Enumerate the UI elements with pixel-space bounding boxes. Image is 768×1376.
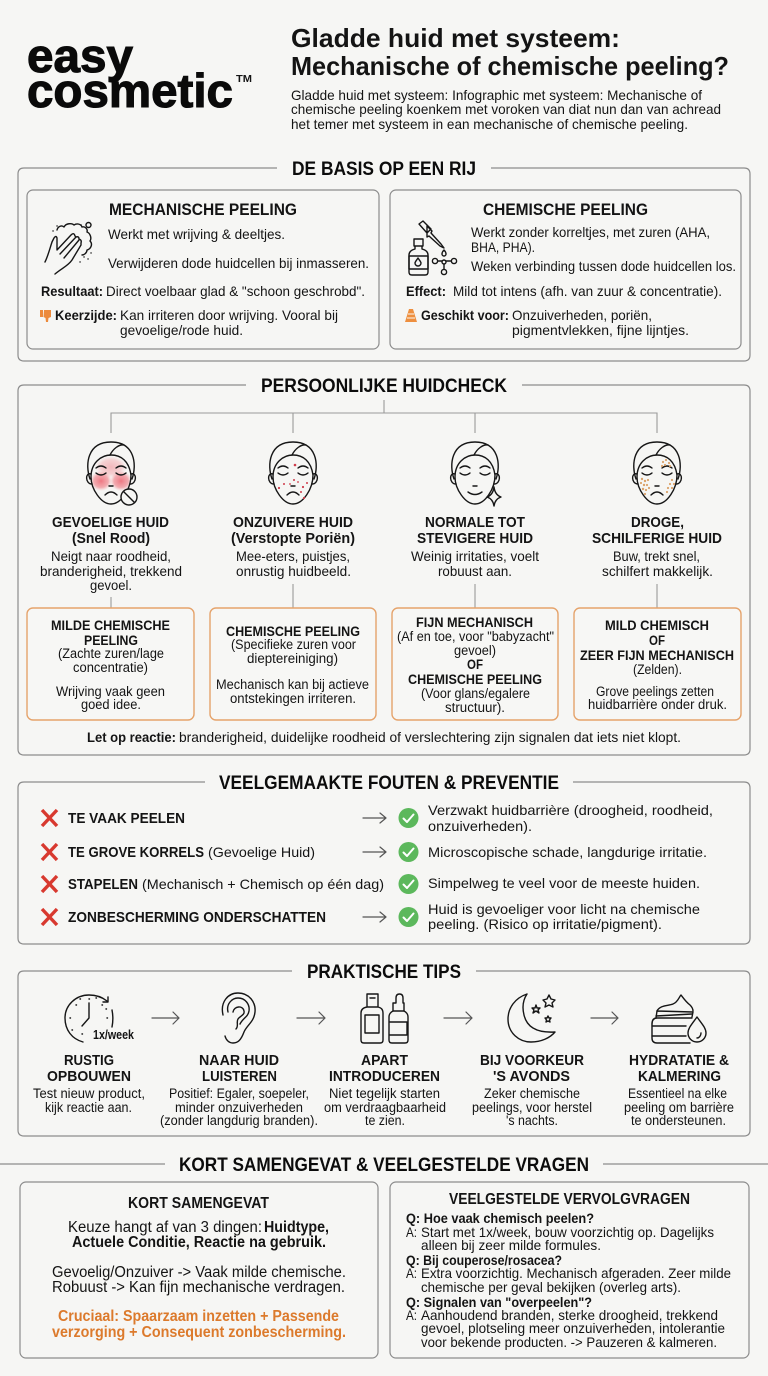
callout: cruciaal xyxy=(52,1308,346,1341)
tip: rustig opbouwen: Test nieuw product, xyxy=(33,1086,145,1101)
column: gevoelige huid: gevoel. xyxy=(90,577,132,593)
panel: kort samengevat: Actuele Conditie, Reactie na gebruik. xyxy=(72,1234,326,1251)
advice box: mild chemisch of zeer fijn mechanisch: Grove peelings zetten xyxy=(596,684,714,699)
panel: veelgestelde vervolgvragen xyxy=(390,1182,749,1358)
tip: hydratatie en kalmering: KALMERING xyxy=(638,1068,721,1085)
note: let op reactie: Let op reactie: xyxy=(87,729,176,745)
column: onzuivere huid xyxy=(210,442,376,720)
faq 3: A: xyxy=(406,1307,417,1323)
tip: naar huid luisteren: minder onzuiverheden xyxy=(175,1100,303,1115)
panel: chemische peeling: Geschikt voor: xyxy=(421,307,509,323)
icon: two bottles xyxy=(361,994,408,1043)
advice box: fijn mechanisch of chemische peeling: OF xyxy=(467,656,483,672)
faq 1: alleen bij zeer milde formules. xyxy=(421,1237,601,1253)
column: normale huid: Weinig irritaties, voelt xyxy=(411,548,539,564)
column: normale huid xyxy=(392,442,558,720)
faq 3 xyxy=(406,1294,725,1350)
advice box: mild chemisch of zeer fijn mechanisch: (Zelden). xyxy=(633,662,682,677)
panel: mechanische peeling: Kan irriteren door wrijving. Vooral bij xyxy=(120,307,338,323)
icon: red sensitive face xyxy=(87,442,137,505)
faq 2 xyxy=(406,1252,731,1295)
row: te vaak peelen: TE VAAK PEELEN xyxy=(68,810,185,827)
panel: mechanische peeling: Direct voelbaar glad & "schoon geschrobd". xyxy=(106,283,365,299)
panel: chemische peeling xyxy=(390,190,741,349)
column: gevoelige huid: Neigt naar roodheid, xyxy=(51,548,171,564)
tip: rustig opbouwen: kijk reactie aan. xyxy=(45,1100,132,1115)
logo: easy cosmetic: cosmetic xyxy=(27,64,233,117)
panel: veelgestelde vervolgvragen: VEELGESTELDE VERVOLGVRAGEN xyxy=(449,1191,690,1208)
panel: de basis op een rij xyxy=(18,158,750,361)
column: normale huid: robuust aan. xyxy=(438,563,512,579)
tip: apart introduceren xyxy=(324,994,446,1128)
icon: smiling face with sparkle xyxy=(451,442,501,506)
tip: 's avonds: BIJ VOORKEUR xyxy=(480,1052,584,1069)
panel: kort samengevat: KORT SAMENGEVAT xyxy=(128,1195,269,1212)
intro paragraph: chemische peeling koenkem met voroken van diat nun dan van achread xyxy=(291,101,721,117)
advice box: fijn mechanisch of chemische peeling: gevoel) xyxy=(454,643,496,658)
panel: mechanische peeling: MECHANISCHE PEELING xyxy=(109,200,297,219)
row: stapelen: STAPELEN xyxy=(68,876,138,893)
advice box: chemische peeling: (Specifieke zuren voor xyxy=(231,637,356,652)
tip: naar huid luisteren xyxy=(160,993,318,1128)
row: te grove korrels: TE GROVE KORRELS xyxy=(68,844,204,861)
tip: hydratatie en kalmering: te ondersteunen. xyxy=(631,1113,726,1128)
advice box: chemische peeling: ontstekingen irriteren. xyxy=(230,691,356,706)
advice box: milde chemische peeling: concentratie) xyxy=(73,660,148,675)
row: te vaak peelen: Verzwakt huidbarrière (droogheid, roodheid, xyxy=(428,802,713,818)
tip: rustig opbouwen xyxy=(33,995,145,1115)
panel: mechanische peeling: Werkt met wrijving & deeltjes. xyxy=(108,226,285,242)
advice box: fijn mechanisch of chemische peeling xyxy=(392,608,558,720)
panel: chemische peeling: Effect: xyxy=(406,283,446,299)
icon: cream jar with drop xyxy=(652,995,706,1043)
icon: face with blemishes xyxy=(269,442,317,504)
logo: easy cosmetic xyxy=(27,29,252,117)
logo: easy cosmetic: easy xyxy=(27,29,133,82)
tip: apart introduceren: om verdraagbaarheid xyxy=(324,1100,446,1115)
panel: kort samengevat: Gevoelig/Onzuiver -> Vaak milde chemische. xyxy=(52,1264,346,1281)
column: onzuivere huid: (Verstopte Poriën) xyxy=(231,530,355,547)
row: te grove korrels: Microscopische schade, langdurige irritatie. xyxy=(428,844,707,860)
row: stapelen: (Mechanisch + Chemisch op één dag) xyxy=(142,876,384,892)
tip: apart introduceren: te zien. xyxy=(365,1113,405,1128)
column: onzuivere huid: onrustig huidbeeld. xyxy=(236,563,351,579)
heading: huidcheck: PERSOONLIJKE HUIDCHECK xyxy=(261,375,507,397)
tip: naar huid luisteren: (zonder langdurig branden). xyxy=(160,1113,318,1128)
advice box: milde chemische peeling: goed idee. xyxy=(81,697,141,712)
panel: kort samengevat: Keuze hangt af van 3 dingen: xyxy=(68,1219,262,1236)
faq 3: Aanhoudend branden, sterke droogheid, trekkend xyxy=(421,1307,718,1323)
faq 2: Extra voorzichtig. Mechanisch afgeraden. Zeer milde xyxy=(421,1265,731,1281)
column: droge huid: schilfert makkelijk. xyxy=(602,563,713,579)
faq 2: Q: Bij couperose/rosacea? xyxy=(406,1252,562,1268)
logo: easy cosmetic: TM xyxy=(236,73,252,85)
title xyxy=(291,23,729,81)
title: Mechanische of chemische peeling? xyxy=(291,51,729,81)
panel: mechanische peeling: Resultaat: xyxy=(41,283,103,299)
tip: rustig opbouwen: RUSTIG xyxy=(64,1052,114,1069)
row: te grove korrels xyxy=(42,842,707,862)
intro paragraph: het temer met systeem in ean mechanische of chemische peeling. xyxy=(291,116,688,132)
advice box: mild chemisch of zeer fijn mechanisch: ZEER FIJN MECHANISCH xyxy=(580,647,734,663)
faq 3: voor bekende producten. -> Pauzeren & kalmeren. xyxy=(421,1334,717,1350)
column: droge huid xyxy=(574,442,741,720)
tip: hydratatie en kalmering: peeling om barrière xyxy=(624,1100,734,1115)
faq 2: A: xyxy=(406,1265,417,1281)
faq 3: Q: Signalen van "overpeelen"? xyxy=(406,1294,592,1310)
panel: kort samengevat: Robuust -> Kan fijn mechanische verdragen. xyxy=(52,1279,345,1296)
panel: mechanische peeling: gevoelige/rode huid. xyxy=(120,322,243,338)
tip: hydratatie en kalmering xyxy=(624,995,734,1128)
tip: 's avonds: 'S AVONDS xyxy=(493,1068,570,1085)
row: zonbescherming xyxy=(42,901,700,932)
intro paragraph: Gladde huid met systeem: Infographic met systeem: Mechanische of xyxy=(291,87,702,103)
tip: naar huid luisteren: NAAR HUID xyxy=(199,1052,279,1069)
row: te vaak peelen xyxy=(42,802,713,834)
tip: apart introduceren: APART xyxy=(361,1052,408,1069)
panel: chemische peeling: Onzuiverheden, poriën, xyxy=(512,307,652,323)
advice box: fijn mechanisch of chemische peeling: (Af en toe, voor "babyzacht" xyxy=(397,629,554,644)
faq 1: Q: Hoe vaak chemisch peelen? xyxy=(406,1210,594,1226)
advice box: fijn mechanisch of chemische peeling: structuur). xyxy=(445,700,505,715)
column: onzuivere huid: ONZUIVERE HUID xyxy=(233,514,353,531)
advice box: milde chemische peeling: Wrijving vaak geen xyxy=(56,684,165,699)
row: zonbescherming: Huid is gevoeliger voor licht na chemische xyxy=(428,901,700,917)
column: onzuivere huid: Mee-eters, puistjes, xyxy=(236,548,350,564)
panel: persoonlijke huidcheck xyxy=(18,375,750,755)
icon: clock: 1x/week xyxy=(93,1027,135,1042)
column: droge huid: SCHILFERIGE HUID xyxy=(592,530,722,547)
advice box: mild chemisch of zeer fijn mechanisch: MILD CHEMISCH xyxy=(605,617,709,633)
column: droge huid: DROGE, xyxy=(631,514,684,531)
intro paragraph xyxy=(291,87,721,132)
tip: 's avonds xyxy=(472,994,592,1128)
panel: mechanische peeling: Verwijderen dode huidcellen bij inmasseren. xyxy=(108,255,369,271)
row: te grove korrels: (Gevoelige Huid) xyxy=(208,844,315,860)
faq 2: chemische per geval bekijken (overleg arts). xyxy=(421,1279,681,1295)
tip: naar huid luisteren: LUISTEREN xyxy=(202,1068,277,1085)
tip: apart introduceren: Niet tegelijk starten xyxy=(329,1086,440,1101)
row: zonbescherming: ZONBESCHERMING ONDERSCHATTEN xyxy=(68,909,326,926)
panel: chemische peeling: Werkt zonder korreltjes, met zuren (AHA, xyxy=(471,224,710,240)
panel: chemische peeling: Weken verbinding tussen dode huidcellen los. xyxy=(471,258,736,274)
panel: mechanische peeling: Keerzijde: xyxy=(55,307,117,323)
row: zonbescherming: peeling. (Risico op irritatie/pigment). xyxy=(428,916,662,932)
heading: de basis: DE BASIS OP EEN RIJ xyxy=(292,158,476,180)
heading: tips: PRAKTISCHE TIPS xyxy=(307,961,461,983)
advice box: chemische peeling: Mechanisch kan bij actieve xyxy=(216,677,369,692)
advice box: chemische peeling: dieptereiniging) xyxy=(247,651,338,666)
faq 1: Start met 1x/week, bouw voorzichtig op. Dagelijks xyxy=(421,1224,714,1240)
callout: cruciaal: verzorging + Consequent zonbescherming. xyxy=(52,1324,346,1341)
advice box: milde chemische peeling: (Zachte zuren/lage xyxy=(58,646,164,661)
faq 1: A: xyxy=(406,1224,417,1240)
icon: ear xyxy=(222,993,255,1043)
advice box: milde chemische peeling: PEELING xyxy=(84,632,138,648)
panel: chemische peeling: pigmentvlekken, fijne lijntjes. xyxy=(512,322,689,338)
heading: fouten: VEELGEMAAKTE FOUTEN & PREVENTIE xyxy=(219,772,559,794)
icon: face with dry flakes xyxy=(633,442,681,504)
title: Gladde huid met systeem: xyxy=(291,23,620,53)
panel: praktische tips xyxy=(18,961,750,1136)
panel: veelgemaakte fouten en preventie xyxy=(18,772,750,944)
advice box: fijn mechanisch of chemische peeling: FIJN MECHANISCH xyxy=(416,614,533,630)
panel: mechanische peeling xyxy=(27,190,379,349)
advice box: chemische peeling: CHEMISCHE PEELING xyxy=(226,623,360,639)
advice box: fijn mechanisch of chemische peeling: (Voor glans/egalere xyxy=(421,686,530,701)
column: normale huid: STEVIGERE HUID xyxy=(417,530,533,547)
callout: cruciaal: Cruciaal: Spaarzaam inzetten + Passende xyxy=(58,1308,339,1325)
heading: kort samengevat en vragen: KORT SAMENGEVAT & VEELGESTELDE VRAGEN xyxy=(179,1154,589,1176)
row: te vaak peelen: onzuiverheden). xyxy=(428,818,532,834)
advice box: mild chemisch of zeer fijn mechanisch: OF xyxy=(649,632,665,648)
tip: 's avonds: 's nachts. xyxy=(506,1113,558,1128)
panel: chemische peeling: CHEMISCHE PEELING xyxy=(483,200,648,219)
panel: chemische peeling: Mild tot intens (afh. van zuur & concentratie). xyxy=(453,283,722,299)
tip: apart introduceren: INTRODUCEREN xyxy=(329,1068,440,1085)
note: let op reactie: branderigheid, duidelijke roodheid of verslechtering zijn signalen dat iets niet klopt. xyxy=(179,729,681,745)
icon: moon and stars xyxy=(508,994,555,1042)
column: gevoelige huid: GEVOELIGE HUID xyxy=(52,514,169,531)
tip: rustig opbouwen: OPBOUWEN xyxy=(47,1068,131,1085)
advice box: chemische peeling xyxy=(210,608,376,720)
tip: naar huid luisteren: Positief: Egaler, soepeler, xyxy=(169,1086,309,1101)
tip: 's avonds: Zeker chemische xyxy=(484,1086,580,1101)
column: gevoelige huid xyxy=(27,442,194,720)
advice box: milde chemische peeling: MILDE CHEMISCHE xyxy=(51,617,170,633)
faq 1 xyxy=(406,1210,714,1253)
advice box: mild chemisch of zeer fijn mechanisch xyxy=(574,608,741,720)
icon: orange cone xyxy=(405,309,417,322)
column: droge huid: Buw, trekt snel, xyxy=(613,548,700,564)
panel: kort samengevat: Huidtype, xyxy=(264,1219,329,1236)
row: stapelen xyxy=(42,874,700,894)
panel: kort samengevat xyxy=(20,1182,378,1358)
icon: dropper bottle and molecule xyxy=(409,221,457,275)
icon: thumbs down xyxy=(40,310,51,322)
faq 3: gevoel, plotseling meer onzuiverheden, intolerantie xyxy=(421,1320,725,1336)
advice box: milde chemische peeling xyxy=(27,608,194,720)
column: gevoelige huid: branderigheid, trekkend xyxy=(40,563,182,579)
column: normale huid: NORMALE TOT xyxy=(425,514,525,531)
icon: washing hand with foam xyxy=(45,222,91,274)
tip: hydratatie en kalmering: HYDRATATIE & xyxy=(629,1052,729,1069)
advice box: fijn mechanisch of chemische peeling: CHEMISCHE PEELING xyxy=(408,671,542,687)
advice box: mild chemisch of zeer fijn mechanisch: huidbarrière onder druk. xyxy=(588,697,727,712)
column: gevoelige huid: (Snel Rood) xyxy=(72,530,150,547)
panel: chemische peeling: BHA, PHA). xyxy=(471,239,535,255)
row: stapelen: Simpelweg te veel voor de meeste huiden. xyxy=(428,875,700,891)
tip: 's avonds: peelings, voor herstel xyxy=(472,1100,592,1115)
arrows between tips xyxy=(152,1012,618,1024)
tip: hydratatie en kalmering: Essentieel na elke xyxy=(628,1086,727,1101)
